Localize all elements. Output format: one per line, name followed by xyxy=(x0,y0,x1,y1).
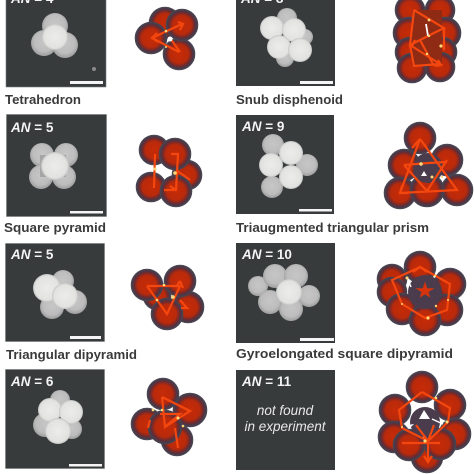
model: AN 11 cluster xyxy=(378,371,471,473)
label: AN = 10: AN = 10 xyxy=(241,247,292,262)
particle: AN 6 cluster xyxy=(33,390,83,444)
panel: triangular dipyramid micrograph xyxy=(6,244,104,342)
scale bar xyxy=(300,338,334,341)
scale bar xyxy=(69,464,102,466)
heading: tetrahedron: Tetrahedron xyxy=(5,93,81,107)
scale bar xyxy=(70,211,103,214)
panel: tetrahedron micrograph xyxy=(6,0,106,87)
model: AN 6 cluster xyxy=(131,378,207,456)
panel: AN 6 micrograph xyxy=(6,370,104,468)
note: not found in experiment: in experiment xyxy=(244,419,327,434)
model: triaugmented triangular prism xyxy=(384,122,473,209)
particle: tetrahedron xyxy=(31,13,78,58)
label: AN = 6: AN = 6 xyxy=(10,374,54,389)
panel: snub disphenoid micrograph xyxy=(236,0,335,86)
label: AN = 9: AN = 9 xyxy=(241,119,284,134)
heading: gyroelongated square dipyramid: Gyroelongated square dipyramid xyxy=(236,347,453,361)
model: gyroelongated square dipyramid xyxy=(377,251,466,336)
particle: triangular dipyramid xyxy=(33,270,87,319)
scale bar xyxy=(300,81,333,84)
scale bar xyxy=(70,336,101,339)
heading: triangular dipyramid: Triangular dipyramid xyxy=(6,348,137,362)
label: AN = 11: AN = 11 xyxy=(241,374,292,389)
label: AN = 5: AN = 5 xyxy=(10,120,54,135)
heading: square pyramid: Square pyramid xyxy=(4,221,106,235)
particle: triaugmented triangular prism xyxy=(259,134,318,198)
heading: triaugmented triangular prism: Triaugmented triangular prism xyxy=(236,221,429,235)
model: tetrahedron xyxy=(135,7,198,70)
particle: square pyramid xyxy=(29,143,78,189)
scale bar xyxy=(299,209,332,212)
particle: snub disphenoid xyxy=(260,8,313,67)
heading: snub disphenoid: Snub disphenoid xyxy=(236,93,343,107)
model: snub disphenoid xyxy=(393,0,461,83)
particle: gyroelongated square dipyramid xyxy=(248,264,320,321)
note: not found in experiment: not found xyxy=(257,403,313,418)
panel: AN 11 placeholder xyxy=(236,370,335,470)
panel: triaugmented triangular prism micrograph xyxy=(236,115,334,214)
label: AN = 5: AN = 5 xyxy=(10,247,54,262)
panel: square pyramid micrograph xyxy=(6,114,106,216)
model: square pyramid xyxy=(136,135,202,207)
scale bar xyxy=(70,81,103,84)
panel: gyroelongated square dipyramid micrograph xyxy=(236,243,335,343)
model: triangular dipyramid xyxy=(131,265,204,330)
